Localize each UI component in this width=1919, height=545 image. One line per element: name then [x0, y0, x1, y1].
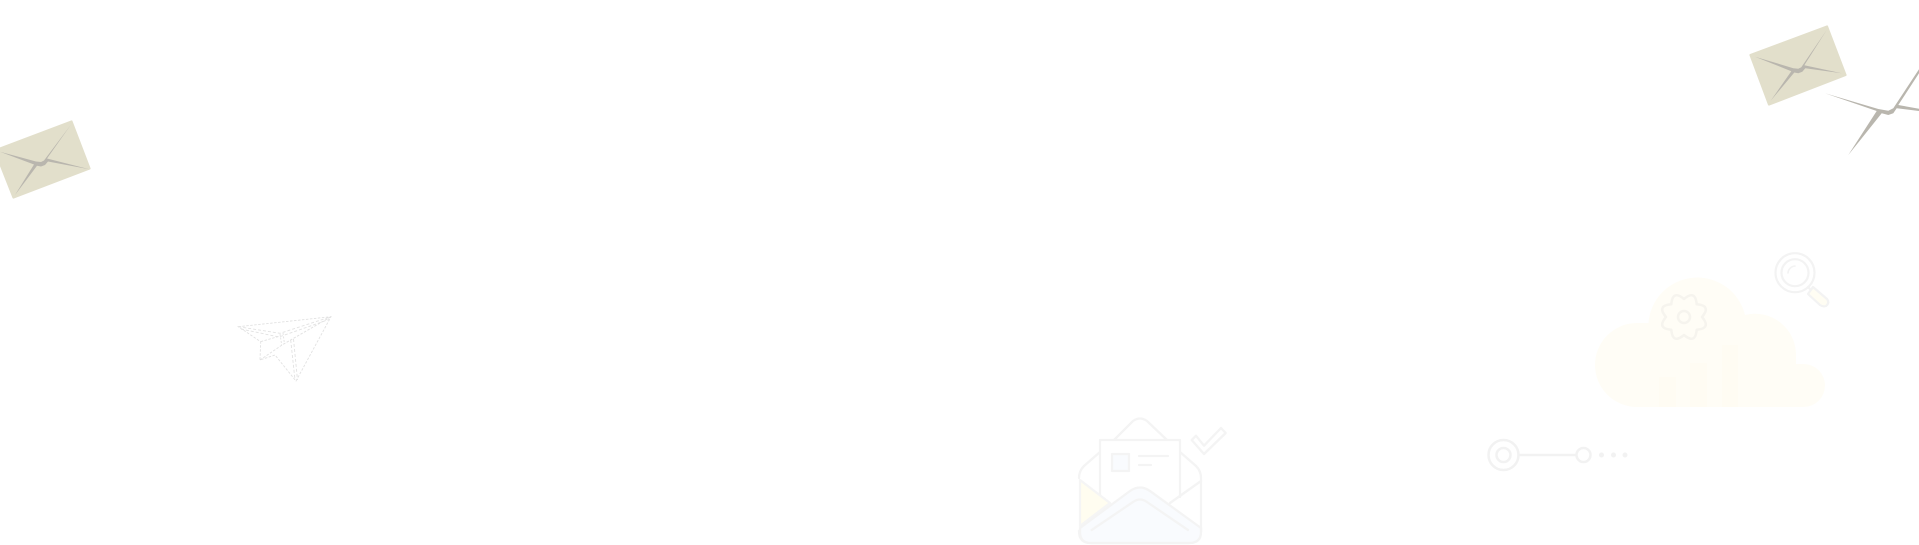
letter picture: [1112, 454, 1129, 471]
icon: gear: [1662, 295, 1706, 339]
yellow side panel: [1080, 480, 1110, 526]
icon: check mark: [1192, 428, 1226, 454]
envelope back flap: [1079, 418, 1201, 543]
letter sheet: [1100, 440, 1180, 497]
icon: envelope left: [0, 122, 90, 198]
right fold line: [1170, 481, 1201, 503]
icon: magnifying glass: [1776, 253, 1828, 306]
icon: envelope top right: [1750, 26, 1846, 104]
icon: dashed paper plane: [238, 317, 331, 381]
blue front flap: [1080, 488, 1201, 543]
icon: connected nodes timeline: [1488, 440, 1628, 470]
icon: open mail with letter: [1079, 418, 1226, 543]
inner flap line: [1092, 500, 1188, 530]
icon: cloud with gear and bars: [1595, 278, 1825, 407]
icon: large envelope flap crease: [1825, 69, 1919, 155]
letter text lines: [1139, 456, 1168, 465]
chart bars: [1659, 345, 1738, 407]
